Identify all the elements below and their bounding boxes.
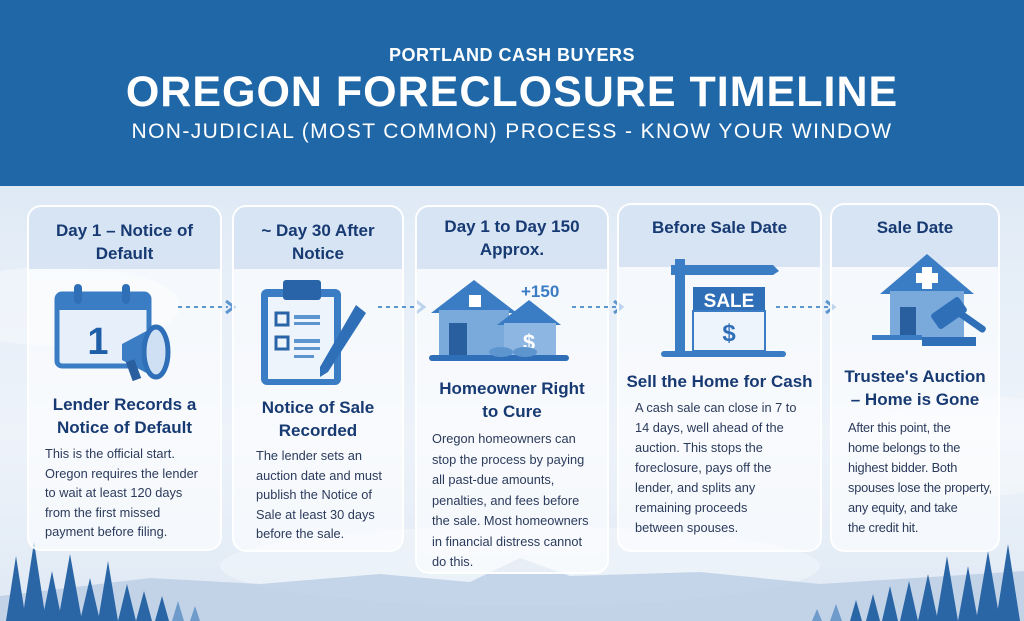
card 4 [617,203,822,552]
header: NON-JUDICIAL (MOST COMMON) PROCESS - KNOW YOUR WINDOW [132,120,892,143]
card 4: foreclosure, pays off the [635,460,771,475]
icon: clipboard [261,280,366,385]
card 3: stop the process by paying [432,452,584,466]
card 5: highest bidder. Both [848,460,957,475]
card 1: to wait at least 120 days [45,485,182,500]
card 2: Notice [292,244,344,263]
card 3: Approx. [480,240,544,259]
card 5: Sale Date [877,218,953,237]
icon: sale sign [661,259,786,357]
icon: calendar megaphone [54,284,170,382]
card 1: from the first missed [45,504,160,520]
card 1: Default [96,244,153,263]
card 4: Sell the Home for Cash [626,372,813,391]
card 3: Homeowner Right [439,379,585,398]
card 5: After this point, the [848,420,950,435]
card 4: A cash sale can close in 7 to [635,400,796,415]
icon: calendar megaphone: 1 [87,321,109,363]
card 5: home belongs to the [848,440,960,455]
icon: houses with money: +150 [521,282,559,301]
card 1: Oregon requires the lender [45,466,198,480]
arrow 1 [178,300,236,314]
background scenery [0,268,1024,621]
card 2: Notice of Sale [262,398,374,417]
arrow 2 [378,300,426,314]
card 4: Before Sale Date [652,218,787,237]
card 2: before the sale. [256,526,344,541]
card 4: 14 days, well ahead of the [635,420,784,435]
card 3: to Cure [482,402,542,421]
card 3: Oregon homeowners can [432,431,576,446]
header: PORTLAND CASH BUYERS [389,45,635,65]
card 1 [27,205,222,551]
card 5: spouses lose the property, [848,480,992,495]
card 2: Sale at least 30 days [256,506,375,522]
card 5: Trustee's Auction [844,367,986,386]
card 3: do this. [432,554,473,569]
card 3: Day 1 to Day 150 [444,217,580,236]
card 1: Day 1 – Notice of [56,221,193,240]
icon: houses with money: $ [523,330,535,355]
card 5: – Home is Gone [851,390,979,409]
card 1: Notice of Default [57,418,192,437]
card 4: auction. This stops the [635,440,763,455]
card 4: between spouses. [635,520,738,535]
icon: houses with money [429,280,569,361]
header [0,0,1024,186]
icon: sale sign: $ [722,320,736,347]
card 4: remaining proceeds [635,500,747,515]
card 5: the credit hit. [848,520,918,535]
card 3: in financial distress cannot [432,534,582,548]
header: OREGON FORECLOSURE TIMELINE [126,68,898,116]
card 1: This is the official start. [45,446,175,461]
card 5 [830,203,1000,552]
card 5: any equity, and take [848,500,958,515]
card 3: all past-due amounts, [432,472,554,487]
card 1: payment before filing. [45,524,167,539]
arrow 4 [776,300,836,314]
card 4: lender, and splits any [635,480,755,495]
card 3: penalties, and fees before [432,492,579,508]
card 3: the sale. Most homeowners [432,513,588,528]
card 2: The lender sets an [256,448,362,463]
card 2 [232,205,404,552]
card 2: publish the Notice of [256,487,372,502]
card 3 [415,205,609,574]
arrow 3 [572,300,624,314]
card 2: Recorded [279,421,357,440]
card 2: auction date and must [256,468,382,482]
icon: house with gavel [872,254,986,346]
card 2: ~ Day 30 After [261,221,375,240]
card 1: Lender Records a [53,395,196,414]
icon: sale sign: SALE [704,291,754,312]
